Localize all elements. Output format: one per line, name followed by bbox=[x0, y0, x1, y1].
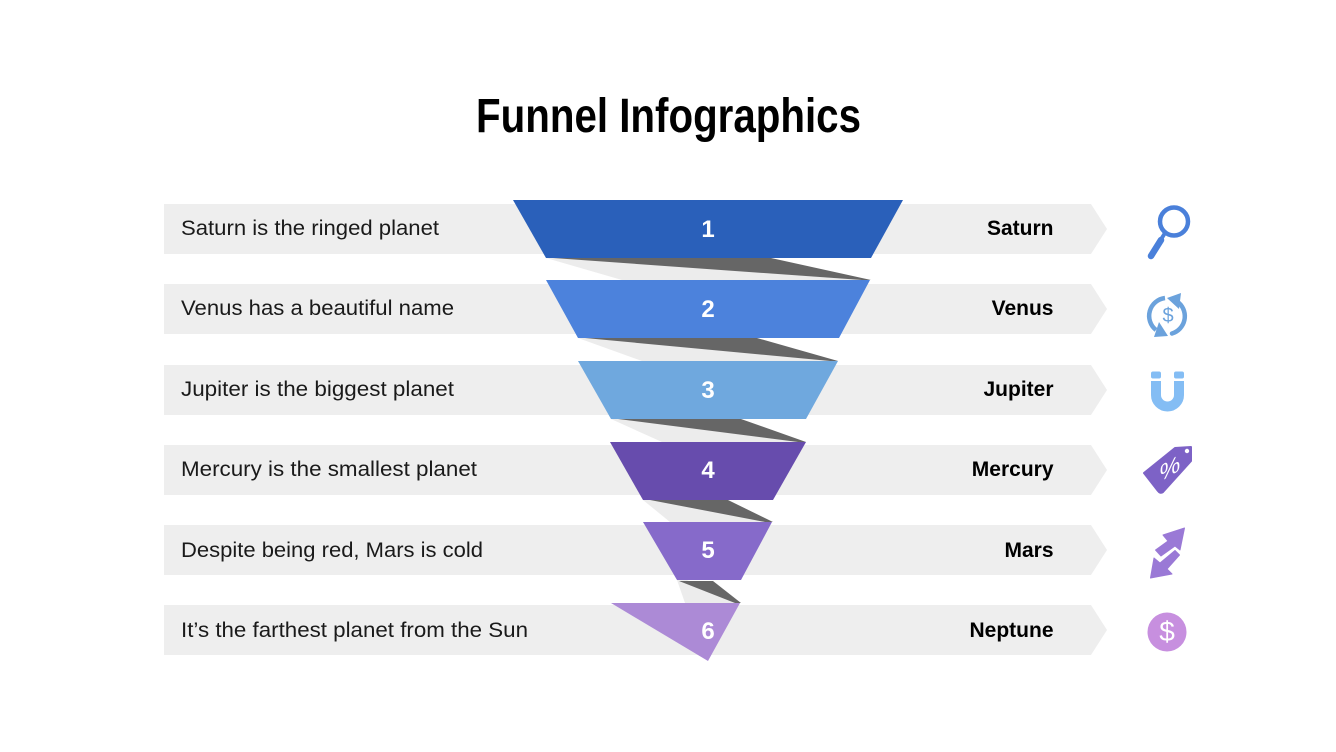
names: Venus bbox=[992, 297, 1054, 320]
icon: dollar cycle bbox=[1149, 293, 1185, 337]
funnel segment 2 bbox=[546, 280, 870, 338]
funnel segment 1 bbox=[513, 200, 903, 258]
descriptions: Jupiter is the biggest planet bbox=[181, 377, 454, 401]
funnel folds bbox=[546, 258, 871, 603]
funnel segment 6 bbox=[611, 603, 740, 661]
funnel segment 3: 3 bbox=[701, 377, 715, 404]
icon: magnet bbox=[1151, 372, 1184, 407]
names: Neptune bbox=[970, 619, 1054, 642]
row bars bbox=[164, 204, 1107, 655]
descriptions bbox=[181, 216, 528, 642]
icon: dollar coin: $ bbox=[1159, 616, 1175, 647]
icon: percent tag: % bbox=[1160, 451, 1180, 487]
icon: dollar cycle: $ bbox=[1162, 305, 1174, 327]
icon: magnifier bbox=[1151, 208, 1188, 256]
descriptions: Saturn is the ringed planet bbox=[181, 216, 439, 240]
icon: dollar coin bbox=[1148, 612, 1186, 652]
names bbox=[970, 217, 1054, 642]
descriptions: Despite being red, Mars is cold bbox=[181, 538, 483, 562]
names: Mars bbox=[1004, 539, 1054, 562]
funnel segment 2: 2 bbox=[701, 296, 715, 323]
descriptions: It’s the farthest planet from the Sun bbox=[181, 618, 528, 642]
funnel segment 1: 1 bbox=[701, 216, 715, 243]
descriptions: Venus has a beautiful name bbox=[181, 296, 454, 320]
funnel segment 4: 4 bbox=[701, 457, 715, 484]
funnel segment 3 bbox=[578, 361, 838, 419]
names: Mercury bbox=[972, 458, 1054, 481]
funnel segment 4 bbox=[610, 442, 806, 500]
icon: percent tag bbox=[1144, 447, 1191, 493]
names: Jupiter bbox=[983, 378, 1054, 401]
descriptions: Mercury is the smallest planet bbox=[181, 457, 477, 481]
funnel segment 5: 5 bbox=[701, 537, 715, 564]
title: Funnel Infographics bbox=[476, 90, 861, 143]
funnel segment 6: 6 bbox=[701, 618, 715, 645]
icon: exchange arrows bbox=[1150, 528, 1184, 578]
funnel segment 5 bbox=[643, 522, 772, 580]
names: Saturn bbox=[987, 217, 1054, 240]
